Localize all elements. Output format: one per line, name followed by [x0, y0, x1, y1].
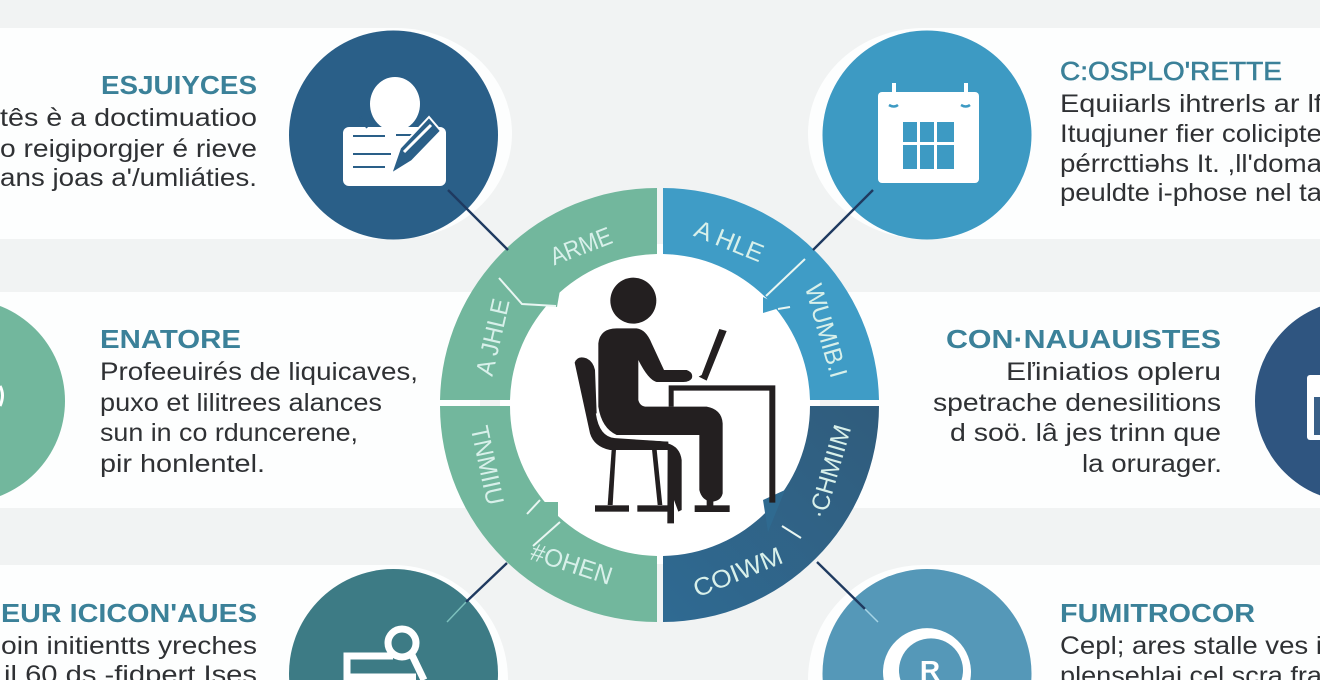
body text: [0, 104, 257, 192]
body text: [933, 358, 1222, 478]
body text: sun in co rduncerene,: [100, 419, 358, 447]
ring segment: bottom left: [440, 406, 657, 622]
connector lines: [447, 190, 878, 622]
panel: bottom right: [822, 569, 1320, 680]
icon: partial glyph: [0, 386, 2, 406]
icon circle: [1255, 300, 1320, 502]
body text: puxo et lilitrees alances: [100, 389, 382, 417]
ring label: top left: ARME: [546, 222, 616, 271]
icon: person at desk: [575, 278, 775, 523]
icon: profile with pencil: [343, 77, 446, 186]
ring label: left upper: A JHLE: [471, 296, 516, 378]
body text: peuldte i-phose nel ta: [1060, 179, 1320, 207]
icon circle: [822, 30, 1032, 240]
laptop: [699, 329, 727, 381]
body text: Ituqjuner fier colicipte: [1060, 120, 1320, 148]
body text: [1, 632, 257, 680]
body text: Eľiniatios opleru: [1006, 358, 1221, 386]
panel: middle left: [0, 299, 418, 503]
ring label: top right: A HLE: [690, 215, 768, 268]
ring label: left lower: TNMIIU: [465, 423, 509, 507]
body: [598, 328, 723, 502]
heading: CON·NAUAUISTES: [946, 324, 1221, 354]
body text: Equiiarls ihtrerls ar lf: [1060, 90, 1320, 118]
centre white disc: [500, 244, 820, 564]
body text: tês è a doctimuatioo: [0, 104, 257, 132]
panel: middle right: [933, 300, 1320, 502]
desk: [669, 385, 775, 503]
icon circle: [0, 299, 65, 503]
body text: [1060, 90, 1320, 207]
panel: top left: [0, 30, 498, 240]
ring label: bottom left: #OHEN: [527, 538, 616, 591]
ring segment: top right: [663, 188, 879, 400]
heading: EUR ICICON'AUES: [1, 598, 257, 628]
icon: document: [1307, 375, 1320, 440]
head: [610, 278, 656, 324]
panel: bottom left: [1, 569, 498, 680]
ring label: bottom right: COIWM: [689, 542, 787, 603]
ring segment: top left: [440, 188, 657, 400]
chair legs: [595, 443, 682, 523]
body text: ans joas a'/umliáties.: [0, 164, 257, 192]
central ring diagram: [440, 188, 879, 622]
ring segment: bottom right: [663, 406, 879, 622]
foot: [695, 500, 730, 512]
body text: o reigiporgjer é rieve: [0, 135, 257, 163]
chair: [575, 357, 668, 450]
heading: ENATORE: [100, 324, 241, 354]
icon: figure outline: [347, 629, 424, 680]
body text: oin initientts yreches: [1, 632, 257, 660]
heading: ESJUIYCES: [101, 70, 257, 100]
panel: top right: [822, 30, 1320, 240]
icon circle: [822, 569, 1032, 680]
ring notches: [499, 259, 805, 546]
ring label: right lower: ·CHMIIM: [804, 422, 857, 522]
icon circle: [289, 569, 498, 680]
body text: spetrache denesilitions: [933, 389, 1221, 417]
body text: Profeeuirés de liquicaves,: [100, 358, 418, 386]
icon: calendar: [878, 83, 979, 183]
body text: pir honlentel.: [100, 450, 265, 478]
body text: pérrcttiəhs It. ,ll'doma: [1060, 150, 1320, 178]
body text: [100, 358, 418, 478]
body text: d soö. lâ jes trinn que: [950, 419, 1221, 447]
ring label: right upper: WUMIB.I: [799, 281, 852, 381]
body text: [1060, 632, 1320, 680]
body text: la orurager.: [1082, 450, 1222, 478]
heading: C:OSPLO'RETTE: [1060, 56, 1282, 86]
icon: registered mark: [883, 628, 971, 680]
heading: FUMITROCOR: [1060, 598, 1255, 628]
icon circle: [289, 30, 498, 240]
chair highlight: [597, 413, 667, 441]
body text: Cepl; ares stalle ves i: [1060, 632, 1320, 660]
